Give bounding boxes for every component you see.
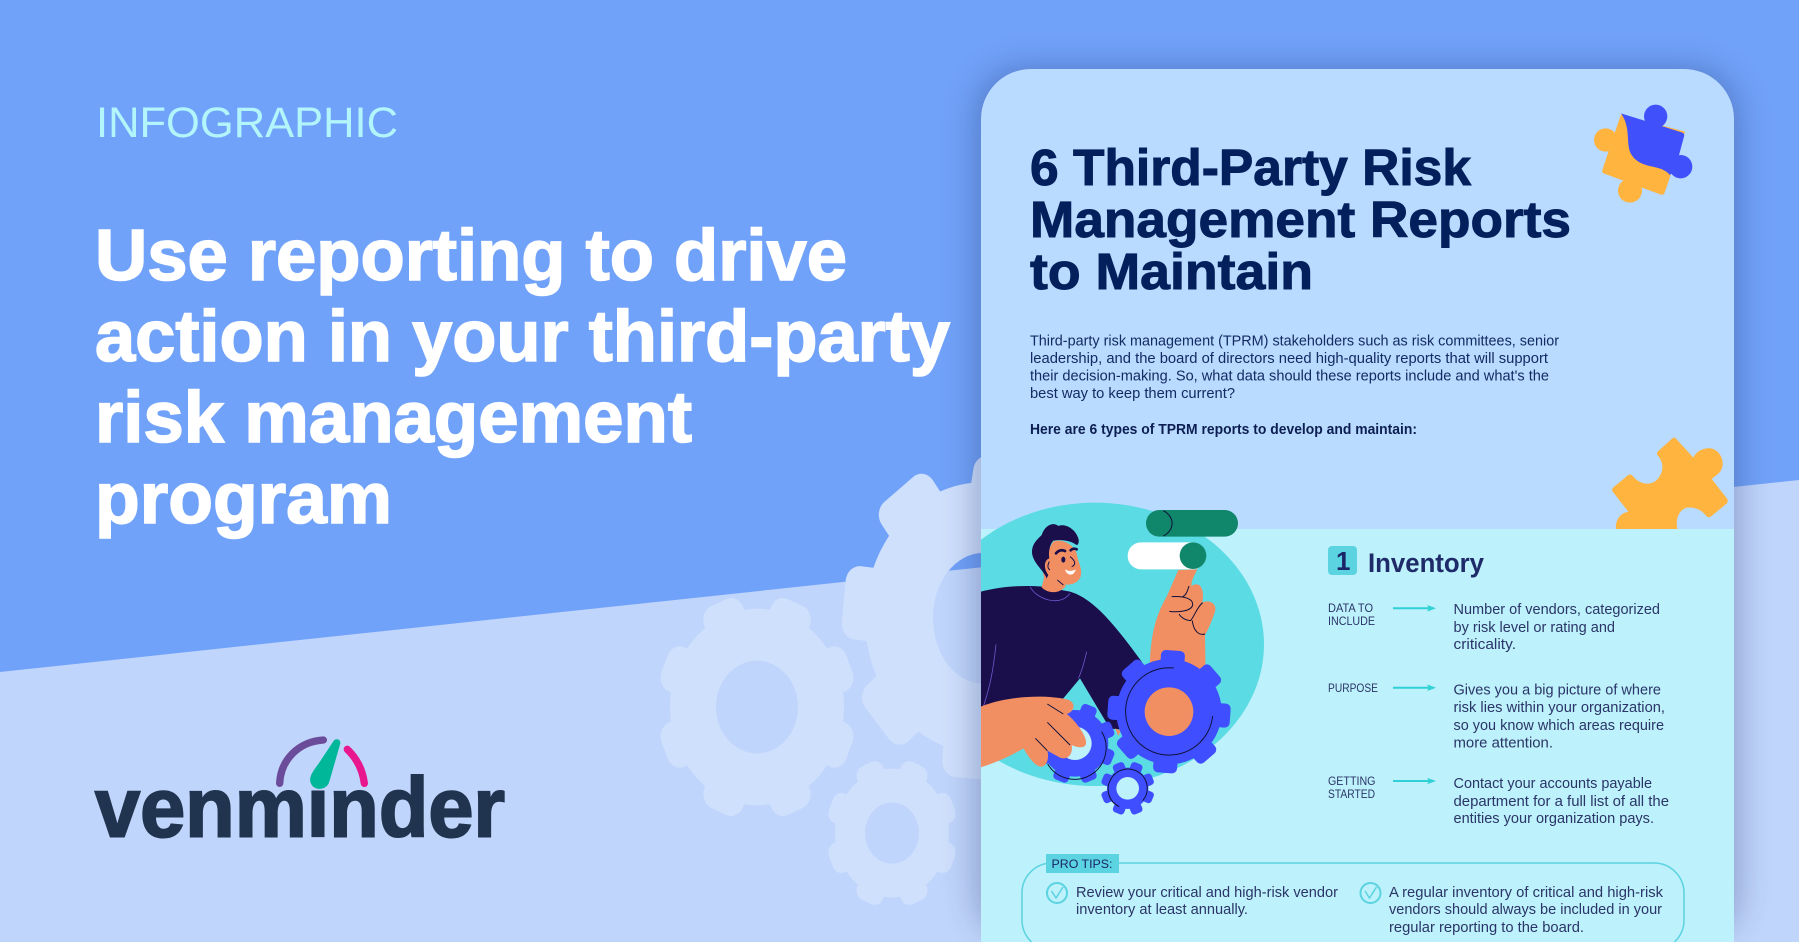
row: data to include: by risk level or rating and (1454, 619, 1615, 636)
decorative gears (660, 458, 981, 905)
pro tips tab (1046, 854, 1119, 873)
row: getting started (1328, 775, 1669, 827)
panel: card header background (981, 69, 1734, 539)
row: purpose: Gives you a big picture of where (1454, 682, 1661, 698)
title: card heading: 6 Third-Party Risk (1030, 139, 1472, 196)
logo: venminder: venminder (95, 760, 505, 854)
icon: check 2 (1360, 883, 1380, 903)
small gear (1100, 761, 1155, 816)
row: data to include: Number of vendors, categorized (1454, 601, 1660, 618)
row: getting started: GETTING (1328, 776, 1376, 788)
title: card heading (1030, 139, 1571, 300)
row: getting started: department for a full list of all the (1454, 793, 1669, 810)
row: purpose: risk lies within your organization, (1454, 699, 1665, 716)
icon: top puzzle pieces (1594, 105, 1692, 203)
tip 2 text: A regular inventory of critical and high-risk (1389, 884, 1663, 901)
row: getting started: STARTED (1328, 789, 1375, 801)
title: main headline: program (95, 459, 392, 539)
medium gear (1046, 704, 1114, 783)
row: getting started: entities your organization pays. (1454, 810, 1654, 827)
row: data to include (1328, 601, 1660, 653)
pro tips tab: PRO TIPS: (1052, 857, 1112, 871)
label: infographic eyebrow: INFOGRAPHIC (96, 99, 398, 147)
toggle: green (1146, 510, 1238, 537)
row: getting started: Contact your accounts payable (1454, 775, 1652, 792)
text block: card intro (1030, 334, 1559, 402)
large gear (1107, 650, 1231, 774)
tip 1 text (1076, 884, 1338, 918)
heading: 1 Inventory: 1 (1336, 546, 1350, 576)
logo gauge icon (280, 739, 364, 789)
row: purpose (1328, 682, 1665, 752)
gear: small lower (826, 758, 958, 908)
card shadow (974, 66, 1740, 942)
title: card heading: to Maintain (1030, 243, 1313, 300)
panel: inventory section background (981, 529, 1734, 942)
toggle: white (1128, 542, 1206, 569)
lower hand holding gear (981, 697, 1086, 767)
icon: check 1 (1047, 883, 1067, 903)
gear: large left (657, 594, 857, 820)
text block: card intro: Third-party risk management (TPRM) stakeholders such as risk committees, senior (1030, 334, 1559, 350)
text block: card intro: leadership, and the board of directors need high-quality reports that will support (1030, 351, 1548, 367)
pointing hand (1150, 569, 1215, 677)
row: purpose: more attention. (1454, 734, 1553, 752)
puzzle piece: yellow (1594, 114, 1685, 203)
sweater (981, 586, 1142, 736)
text block: card intro: best way to keep them current? (1030, 386, 1235, 402)
title: main headline (95, 216, 950, 539)
row: data to include: criticality. (1454, 636, 1516, 653)
row: data to include: INCLUDE (1328, 616, 1375, 628)
tip 2 text: vendors should always be included in your (1389, 901, 1662, 918)
title: main headline: action in your third-party (95, 297, 950, 377)
title: main headline: risk management (95, 378, 692, 458)
row: purpose: PURPOSE (1328, 683, 1378, 695)
row: data to include: DATA TO (1328, 603, 1373, 615)
title: main headline: Use reporting to drive (95, 216, 847, 296)
heading: 1 Inventory: Inventory (1368, 548, 1484, 578)
tip 2 text: regular reporting to the board. (1389, 919, 1584, 936)
teal circle backdrop (981, 502, 1264, 786)
background: pale lower area (0, 480, 1799, 942)
row: purpose: so you know which areas require (1454, 717, 1664, 734)
text block: card intro: their decision-making. So, what data should these reports include and what's the (1030, 368, 1549, 384)
tip 1 text: inventory at least annually. (1076, 901, 1248, 918)
gear hole: blue showing above diagonal (948, 553, 981, 571)
gear: big behind card (840, 453, 1101, 781)
panel: pro tips (1022, 854, 1684, 942)
text block: intro lead-in: Here are 6 types of TPRM reports to develop and maintain: (1030, 422, 1417, 438)
panel: infographic card (926, 69, 1734, 942)
icon: bottom puzzle piece (1612, 437, 1728, 530)
puzzle piece: blue (1621, 105, 1692, 178)
illustration: person with gears and toggles (926, 503, 1264, 816)
tip 1 text: Review your critical and high-risk vendor (1076, 884, 1338, 901)
neck and head (1030, 524, 1081, 601)
title: card heading: Management Reports (1030, 191, 1571, 248)
tip 2 text (1389, 884, 1663, 936)
heading: 1 Inventory (1328, 546, 1484, 578)
